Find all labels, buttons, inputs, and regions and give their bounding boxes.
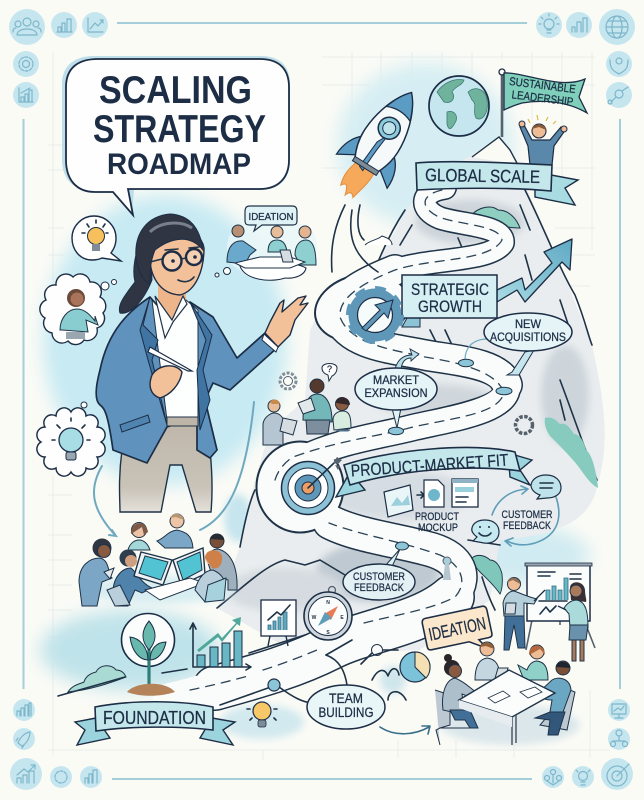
bubble: customer feedback on road [343,542,415,600]
bubble: customer feedback on road: FEEDBACK [354,582,405,594]
bar chart [190,617,251,670]
mountain [217,137,605,655]
title speech bubble [62,56,290,215]
rocket [321,76,437,212]
box: strategic growth [402,275,497,327]
icon group: top-left corner [9,9,108,108]
icon: gear with arrow [349,289,401,341]
label: product mockup: MOCKUP [418,522,458,534]
banner: product-market fit [336,448,532,497]
title text: ROADMAP [107,148,251,181]
watercolor wash: behind rocket [337,63,513,227]
bubble: new acquisitions: NEW [515,319,541,331]
frame line: right [619,119,621,689]
thought bubble: lightbulb cloud [37,402,105,476]
frame line: top [117,22,527,24]
banner: foundation: FOUNDATION [103,708,206,728]
bubble: market expansion: EXPANSION [364,388,428,400]
summit person cheering [519,115,567,165]
title text: SCALING [99,69,252,112]
arrow: curved down to team [94,402,254,536]
growth arrow [497,239,572,302]
label: customer feedback: FEEDBACK [503,520,552,532]
team at computers [79,514,237,606]
icon group: bottom-right corner [542,699,633,790]
frame line: left [22,119,24,689]
thought bubble: lightbulb [72,216,121,261]
bubble: team building: TEAM [329,691,363,706]
ideation tag: IDEATION [248,212,294,223]
bubble: new acquisitions [458,313,572,375]
thought bubble: woman with notepad [40,274,116,345]
rocket exhaust swoosh and cloud [332,205,392,272]
road [170,188,507,700]
meeting table scene [435,642,580,745]
label: customer feedback [502,509,553,532]
icon group: top-right corner [536,9,635,108]
watercolor wash: beside target [224,494,252,542]
group of colleagues with devices [263,364,351,445]
banner: global scale: GLOBAL SCALE [425,165,540,187]
flag text [508,76,577,109]
watercolor wash: around bulb [220,705,304,739]
sticky note: ideation [421,605,495,660]
group of colleagues with devices: ? [327,364,332,374]
icon: compass: S [326,630,330,636]
globe [429,76,489,136]
title text: STRATEGY [93,108,266,151]
bubble: new acquisitions: ACQUISITIONS [490,332,566,344]
bubble: market expansion: MARKET [373,375,419,387]
icon group: bottom-left corner [10,699,102,790]
label: product mockup [415,511,459,534]
icon: sprout [122,614,175,696]
icon: compass: W [312,615,317,621]
flag text: LEADERSHIP [511,89,574,109]
bubble: team building: BUILDING [318,705,374,720]
presenter man [503,578,545,650]
watercolor wash: behind presenter [43,195,287,485]
label: customer feedback: CUSTOMER [502,509,553,521]
road node [496,387,512,395]
icon: compass [304,586,352,640]
sticky note: ideation: IDEATION [427,613,488,645]
bubble: customer feedback on road: CUSTOMER [353,571,405,583]
presentation board [525,563,595,650]
icon: lightbulb [247,702,277,727]
thought bubble: ideation meeting [215,206,317,280]
presenter woman [96,214,308,512]
box: strategic growth: GROWTH [418,297,482,316]
watercolor wash: foundation ground [40,610,220,690]
product mockup icons [384,479,478,534]
banner: foundation [75,702,235,745]
flag text: SUSTAINABLE [508,76,577,96]
summit flag [499,69,587,137]
network doodles and pie chart [361,644,430,700]
watercolor wash: right valley [450,525,590,585]
label: product mockup: PRODUCT [415,511,459,523]
icon: compass: E [340,615,344,621]
frame line: bottom [112,778,532,780]
presenter woman at board [558,582,588,661]
customer feedback loop [472,475,561,546]
title text [93,69,266,181]
box: strategic growth: STRATEGIC [411,280,489,299]
banner: product-market fit: PRODUCT-MARKET FIT [350,451,509,481]
bubble: market expansion [355,349,437,435]
hill with shrubs [58,666,126,696]
road pin marker [443,557,451,580]
icon: target [282,457,342,514]
banner: global scale [416,162,578,205]
chart board on easel [261,600,296,646]
ground strokes [162,635,305,673]
icon: gear on mountain [516,416,532,434]
icon: compass: N [326,600,330,606]
bubble: team building [220,640,430,734]
